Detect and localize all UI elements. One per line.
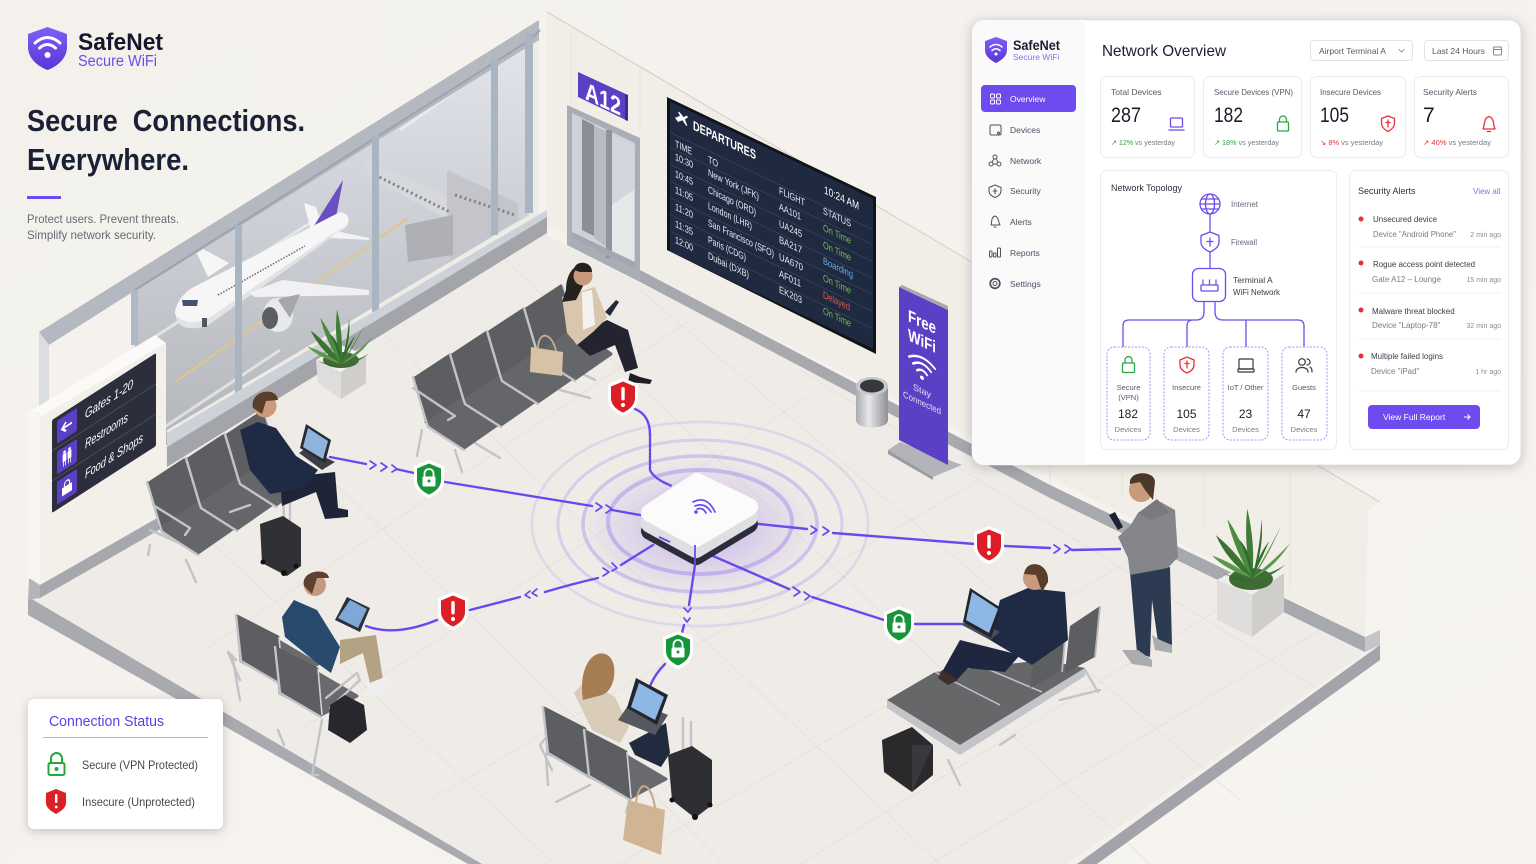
free wifi banner: Stay [913,382,931,401]
jet bridge [363,160,518,262]
person: man with laptop [240,392,348,519]
free wifi banner: Connected [903,389,941,417]
gate door [567,105,640,282]
icon: shield wifi [28,27,67,70]
sign panel: Restrooms [85,410,128,452]
alert item 2: 15 min ago [1466,277,1501,284]
icon: laptop [1169,118,1184,130]
brand logo: Secure WiFi [78,53,157,70]
right baseboard [640,270,1365,652]
tagline [27,212,179,242]
departures board: Dubai (DXB) [708,250,749,281]
button: view full report: View Full Report [1383,412,1446,422]
panel: security alerts: View all [1473,187,1501,196]
panel: network topology: Network Topology [1111,183,1182,194]
wall behind window [39,20,539,600]
card: security alerts [1414,76,1508,158]
icon: overview [990,94,1000,104]
departures board: Boarding [823,255,853,281]
alert item 4 [1358,352,1501,376]
right front base [1067,645,1380,864]
icon: lock [1278,116,1288,131]
departures board: On Time [823,305,851,330]
card: secure devices [1204,76,1302,158]
alert item 1: Unsecured device [1373,215,1438,224]
person: woman with phone [562,263,652,384]
backpack [328,695,367,743]
node: secure: 182 [1118,407,1138,421]
departures board [667,97,876,354]
panel: security alerts [1350,170,1508,450]
alert item 1: Device "Android Phone" [1373,230,1456,239]
node: secure: Devices [1115,425,1142,434]
dropdown: time range [1424,40,1508,60]
dashboard window [972,20,1521,465]
gate sign A12: A12 [585,76,621,121]
panel: network topology: Firewall [1231,238,1257,247]
briefcase [882,727,933,792]
card: total devices [1100,76,1194,158]
alert item 3: Malware threat blocked [1372,307,1455,316]
icon: wifi [693,500,715,513]
alert item 4: Device "iPad" [1371,367,1420,376]
window sill [167,210,547,447]
departures board: On Time [823,239,851,264]
right plant [1212,509,1290,637]
brand logo: SafeNet [78,29,163,56]
card: secure devices: ↗ 18% vs yesterday [1214,138,1279,147]
card: total devices: Total Devices [1111,87,1162,97]
departures board: New York (JFK) [708,167,759,203]
legend: connection status [28,699,223,829]
node: iot: IoT / Other [1228,383,1264,392]
departures board: Chicago (ORD) [708,184,756,218]
tarmac stripes [175,218,408,382]
icon: plane [675,110,688,127]
node: guests: Devices [1291,425,1318,434]
alert item 2: Rogue access point detected [1373,260,1475,269]
departures board: UA670 [779,251,803,274]
icon: shield alert [46,789,66,814]
departures board: 11:05 [675,184,693,204]
sidebar: Secure WiFi [1013,52,1059,62]
card: insecure devices: ↘ 8% vs yesterday [1320,138,1383,147]
wall panel seams [571,33,1290,590]
departures board: London (LHR) [708,200,752,233]
panel: network topology: Internet [1231,200,1259,209]
card: total devices: ↗ 12% vs yesterday [1111,138,1175,147]
icon: security [989,185,1001,198]
alert item 3: Device "Laptop-78" [1372,321,1441,330]
node: secure [1107,347,1150,440]
button: view full report [1368,405,1480,429]
sign panel [52,353,156,513]
departures board: AF011 [779,268,801,290]
suitcase: left [260,486,301,576]
brand logo [28,27,163,70]
dropdown: location: Airport Terminal A [1319,46,1386,56]
icon: firewall shield [1201,232,1219,252]
connector tree [1123,214,1304,347]
tagline: Protect users. Prevent threats. [27,212,179,226]
alert item 1 [1358,215,1501,239]
alert item 2: Gate A12 – Lounge [1372,275,1442,284]
gate sign A12 [578,72,628,121]
panel: network topology [1100,170,1336,450]
free wifi banner: WiFi [908,325,936,357]
sidebar: Overview [1010,94,1046,104]
departures board: TIME [675,138,692,158]
card: security alerts: 7 [1423,104,1435,127]
person: woman with laptop and seats [540,653,670,812]
signal rings [532,422,868,626]
window frame [39,20,539,345]
shields on links [414,378,1004,669]
alert item 2 [1358,260,1501,284]
departures board: DEPARTURES [693,118,756,162]
panel: network topology: WiFi Network [1233,287,1281,297]
card: insecure devices: 105 [1320,104,1349,127]
sidebar: Reports [1010,248,1040,258]
icon: logo [985,37,1007,63]
airplane [175,180,369,332]
departures board: FLIGHT [779,185,805,209]
sidebar: Network [1010,156,1042,166]
departures board: 10:45 [675,168,693,188]
departures board: EK203 [779,284,802,307]
departures board: TO [708,154,718,170]
legend: connection status: Secure (VPN Protected) [82,758,198,772]
alert item 1: 2 min ago [1470,232,1501,239]
dropdown: time range: Last 24 Hours [1432,46,1485,56]
departures board: Delayed [823,289,850,314]
icon: globe [1200,194,1220,214]
headline line 2: Everywhere. [27,142,189,177]
node: guests [1282,347,1327,440]
card: secure devices: 182 [1214,104,1243,127]
sidebar: Alerts [1010,217,1032,227]
legend: connection status: Insecure (Unprotected) [82,795,195,809]
node: guests: Guests [1292,383,1316,392]
departures board: AA101 [779,201,801,223]
card: secure devices: Secure Devices (VPN) [1214,87,1293,97]
departures board: On Time [823,222,851,247]
central wifi router [650,482,749,565]
node: secure: (VPN) [1118,393,1139,402]
accent rule [27,196,61,199]
headline: Secure Connections. [27,103,305,138]
node: insecure: Insecure [1172,383,1201,392]
node: insecure: 105 [1176,407,1197,421]
card: insecure devices: Insecure Devices [1320,87,1381,97]
window wall with airport view [39,20,547,600]
alert item 3: 32 min ago [1466,323,1501,330]
icon: devices [990,125,1001,135]
sign panel: Gates 1-20 [85,377,133,422]
left front base [28,598,482,864]
person: standing man with phone [1109,473,1178,667]
card: security alerts: ↗ 40% vs yesterday [1423,138,1491,147]
card: security alerts: Security Alerts [1423,87,1477,97]
sidebar: SafeNet [1013,38,1060,53]
sidebar: Settings [1010,279,1041,289]
departures board: On Time [823,272,851,297]
seating: woman's row [413,286,611,472]
icon: reports [990,248,1000,257]
departures board: UA245 [779,218,802,241]
dashboard title: Network Overview [1102,43,1226,60]
icon: lock [48,753,64,775]
dropdown: location [1310,40,1412,60]
person: seated man on right with seats [887,564,1100,785]
sidebar [981,37,1076,289]
departures board: BA217 [779,234,802,257]
sidebar: Security [1010,186,1041,196]
departures board: STATUS [823,205,851,230]
connection lines [330,409,1120,686]
card: total devices: 287 [1111,104,1141,127]
icon: network [989,155,1001,166]
tagline: Simplify network security. [27,228,156,242]
departures board: 11:20 [675,201,693,221]
node: insecure: Devices [1173,425,1200,434]
wayfinding sign pier [28,335,166,600]
seating: left row [147,412,312,582]
icon: wifi router [1192,268,1226,302]
direction chevrons [370,461,1071,622]
person: man with tablet and seats [228,571,397,775]
icon: settings [990,279,1000,288]
node: guests: 47 [1297,407,1311,421]
card: insecure devices [1310,76,1406,158]
right pier end [1365,502,1380,652]
floor tiles [150,255,1320,864]
departures board: 12:00 [675,234,693,254]
free wifi banner [888,285,962,480]
departures board: 11:35 [675,218,693,238]
suitcase: bottom [668,718,712,820]
icon: wifi [909,352,935,379]
right wall [547,12,1380,645]
left plant [307,310,373,399]
floor [30,232,1365,864]
departures board: 10:30 [675,151,693,171]
panel: network topology: Terminal A [1233,275,1273,285]
node: insecure [1164,347,1209,440]
alert item 3 [1358,307,1501,330]
node: iot [1223,347,1268,440]
sign panel: Food & Shops [85,430,143,482]
departures board: San Francisco (SFO) [708,217,774,260]
handbag [530,336,563,376]
alert item 4: 1 hr ago [1475,369,1501,376]
departures board: 10:24 AM [824,184,859,213]
glass view [135,40,529,455]
legend: connection status: Connection Status [49,713,164,730]
trash can [856,377,888,428]
alert item 4: Multiple failed logins [1371,352,1443,361]
sidebar: Devices [1010,125,1040,135]
panel: security alerts: Security Alerts [1358,186,1416,196]
node: iot: 23 [1239,407,1252,421]
icon: alerts [991,216,1000,227]
free wifi banner: Free [908,306,936,338]
node: secure: Secure [1117,383,1140,392]
icon: shield [1382,116,1394,132]
node: iot: Devices [1232,425,1259,434]
icon: bell [1483,116,1495,132]
departures board: Paris (CDG) [708,234,746,264]
tote bag [623,786,665,855]
